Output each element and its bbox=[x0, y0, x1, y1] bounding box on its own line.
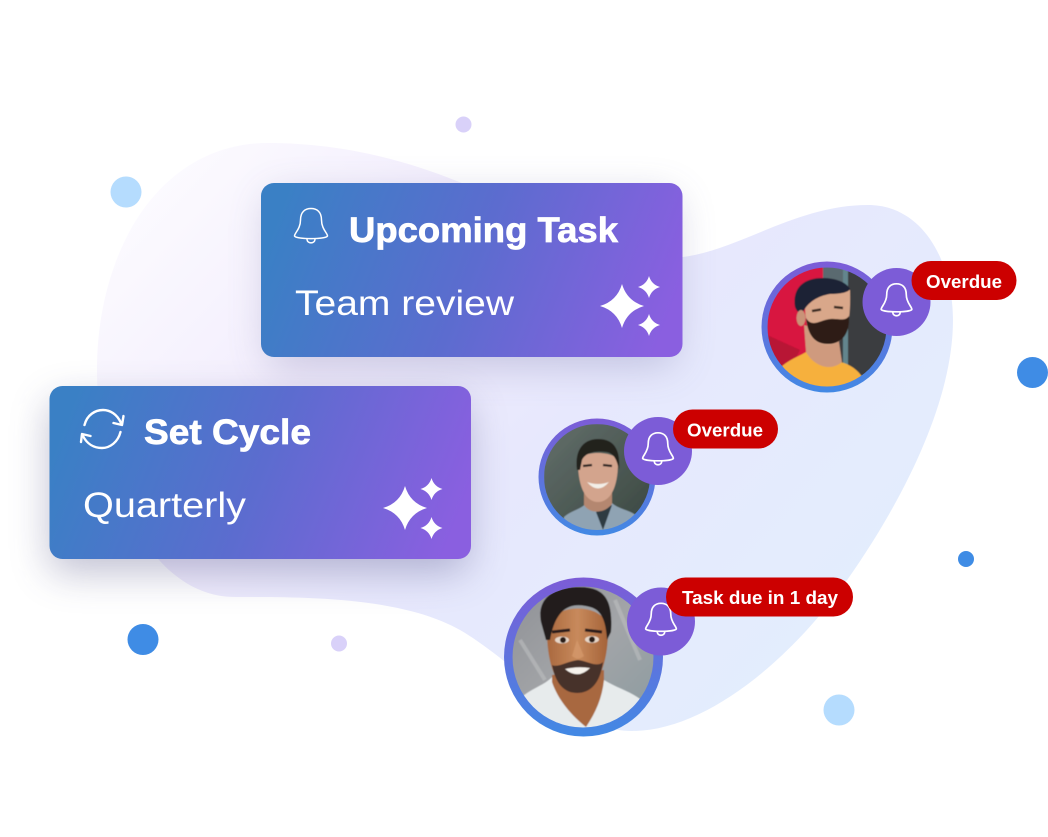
card: Set Cycle bbox=[50, 386, 471, 572]
icon: bell badge bbox=[627, 588, 695, 656]
icon: bell badge bbox=[624, 417, 692, 485]
icon: bell bbox=[294, 208, 328, 243]
card: Upcoming Task bbox=[261, 183, 682, 366]
avatar: man in white shirt bbox=[504, 578, 663, 738]
text: Team review: Team review bbox=[295, 284, 515, 323]
icon: bell badge bbox=[862, 268, 930, 336]
notification: overdue top bbox=[862, 261, 1016, 336]
decorative dot: lavender bottom bbox=[331, 636, 347, 652]
heading: Set Cycle: Set Cycle bbox=[144, 413, 311, 452]
decorative dot: light blue top left bbox=[110, 176, 142, 208]
label: Task due in 1 day: Task due in 1 day bbox=[682, 588, 838, 608]
decorative dot: lavender top bbox=[456, 116, 472, 132]
avatar: smiling man bbox=[538, 418, 656, 536]
icon: cycle arrows bbox=[81, 410, 124, 448]
icon: sparkles bbox=[383, 478, 442, 539]
heading: Upcoming Task: Upcoming Task bbox=[349, 211, 619, 250]
decorative dot: blue right bbox=[1017, 357, 1048, 388]
icon: sparkles bbox=[600, 276, 660, 336]
notification: overdue middle bbox=[624, 410, 778, 485]
label: Overdue: Overdue bbox=[687, 420, 763, 440]
background blob bbox=[97, 143, 953, 731]
label: Overdue: Overdue bbox=[926, 272, 1002, 292]
avatar: man with cap bbox=[762, 262, 892, 392]
decorative dot: blue bottom left bbox=[128, 624, 158, 655]
text: Quarterly: Quarterly bbox=[83, 486, 247, 525]
decorative dot: small blue right bbox=[958, 551, 974, 567]
notification: task due in 1 day bbox=[627, 578, 853, 656]
decorative dot: light blue bottom bbox=[824, 694, 854, 726]
